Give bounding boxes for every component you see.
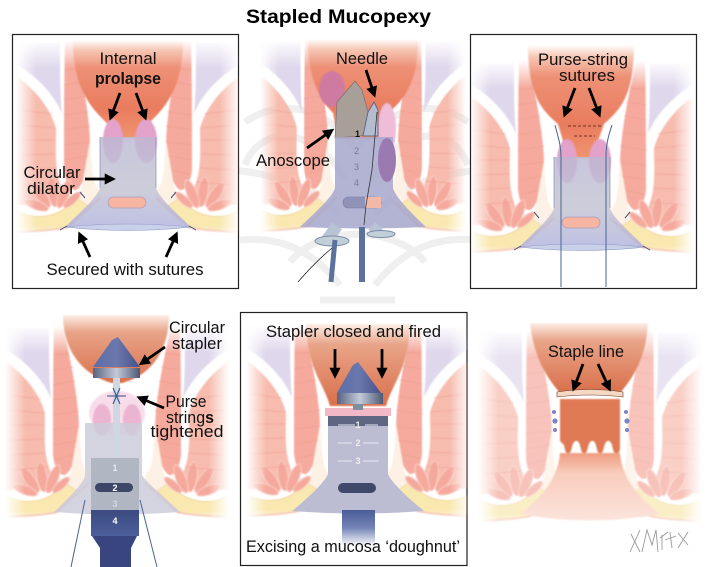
obturator cone: [335, 81, 370, 138]
handles and suture: [298, 112, 395, 282]
label: secured with sutures: Secured with sutures: [46, 261, 204, 279]
label: circular dilator: [24, 164, 81, 198]
label: purse-string sutures: [538, 51, 628, 85]
suture threads: [71, 500, 157, 567]
panel: staple line: [475, 323, 705, 552]
label: needle: Needle: [336, 50, 388, 68]
stapler shaft: [342, 510, 375, 546]
title: Stapled Mucopexy: [246, 6, 431, 28]
label: circular dilator: Circular: [24, 164, 81, 182]
stapler barrel: 1: [112, 463, 118, 473]
anatomy: [13, 40, 243, 233]
anatomy: [2, 315, 232, 518]
purse string knot: [107, 388, 126, 404]
arrows: [307, 70, 374, 148]
panel frame: [240, 312, 467, 566]
scale and slot: 2: [355, 438, 361, 448]
label: purse strings tightened: [150, 393, 224, 441]
arrows: [335, 349, 382, 375]
anatomy: [475, 323, 705, 522]
suture threads: [555, 125, 612, 287]
anoscope: [300, 137, 426, 228]
arrows: [80, 93, 176, 257]
label: stapler closed and fired: Stapler closed and fired: [266, 323, 441, 341]
scale numbers: [354, 129, 360, 188]
stapler barrel: 4: [112, 516, 118, 526]
background watermark: [226, 108, 490, 325]
scale numbers: 2: [354, 146, 359, 156]
scale numbers: 1: [355, 129, 360, 139]
staple dots: [552, 410, 630, 432]
label: purse-string sutures: sutures: [559, 67, 615, 85]
stapler barrel: 3: [112, 499, 118, 509]
arrows: [574, 364, 609, 388]
scale and slot: [338, 420, 379, 493]
label: anoscope: Anoscope: [256, 152, 330, 170]
arrows: [140, 347, 165, 408]
anatomy: [243, 324, 473, 517]
panel frame: [12, 34, 238, 288]
scale and slot: 1: [355, 420, 361, 430]
label: staple line: Staple line: [548, 343, 624, 361]
artist signature: [630, 530, 688, 552]
scale numbers: 3: [354, 162, 359, 172]
anatomy: [467, 45, 697, 253]
label: excising a mucosa doughnut: Excising a mucosa ‘doughnut’: [246, 538, 460, 556]
label: circular stapler: Circular: [169, 319, 225, 337]
scale and slot: 3: [355, 456, 361, 466]
needle holder: [363, 102, 378, 136]
panel frame: [470, 34, 696, 288]
heading: internal prolapse: Internal: [100, 50, 156, 68]
stapler head: [93, 337, 140, 458]
label: circular stapler: [169, 319, 225, 353]
stapler barrel: [91, 458, 139, 567]
label: circular dilator: dilator: [27, 180, 76, 198]
panel: stapler closed and fired: [240, 312, 473, 566]
panel: needle and anoscope: [256, 39, 469, 282]
label: purse-string sutures: Purse-string: [538, 51, 628, 69]
dashed purse-string: [568, 126, 602, 136]
label: purse strings tightened: strings: [166, 409, 214, 427]
scale numbers: 4: [354, 178, 359, 188]
arrows: [565, 88, 599, 114]
stapler head: [337, 362, 383, 410]
panel: purse-string sutures: [467, 34, 697, 288]
stapler barrel: 2: [112, 483, 118, 493]
panel: circular stapler: [2, 315, 232, 567]
label: circular stapler: stapler: [172, 335, 223, 353]
heading: internal prolapse: [95, 50, 161, 88]
label: purse strings tightened: tightened: [150, 423, 224, 441]
anatomy: [257, 39, 469, 232]
label: purse strings tightened: Purse: [166, 393, 206, 411]
heading: internal prolapse: prolapse: [95, 70, 161, 88]
panel: internal prolapse and circular dilator: [12, 34, 243, 288]
